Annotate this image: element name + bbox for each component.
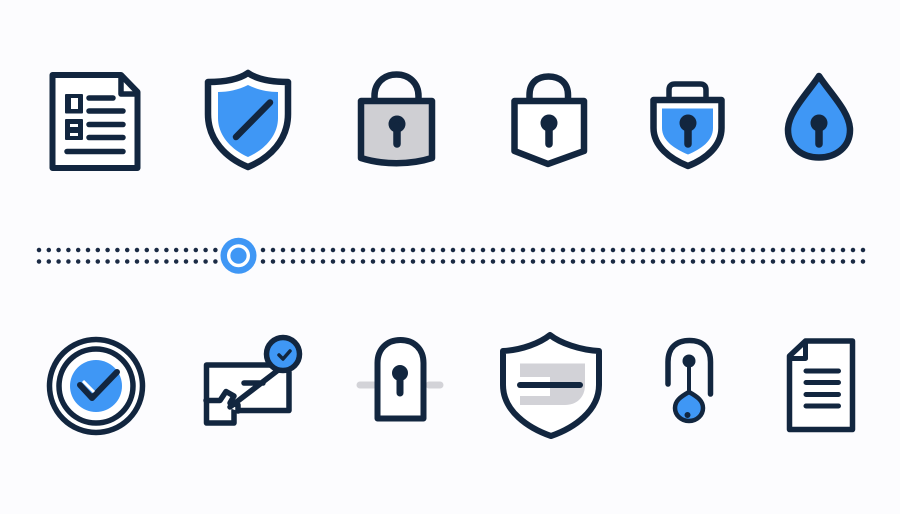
icon: envelope with check and arrow — [206, 338, 300, 423]
icon: pocket-shaped padlock — [514, 76, 584, 164]
icon: document with form fields — [52, 75, 138, 168]
timeline: dotted double line — [39, 250, 864, 262]
icon: shield with grey tab and line — [503, 335, 599, 436]
icon: hook pin with drop — [668, 340, 710, 421]
timeline marker — [220, 238, 256, 274]
icon: grey padlock — [361, 74, 432, 163]
icon: text document — [790, 341, 852, 430]
icon: check badge in double ring — [50, 340, 142, 432]
icon: water drop with keyhole — [788, 76, 850, 158]
icon: shield with slash — [208, 73, 288, 167]
icon: shield padlock — [654, 84, 722, 166]
icon: arched keyhole door — [360, 340, 440, 418]
